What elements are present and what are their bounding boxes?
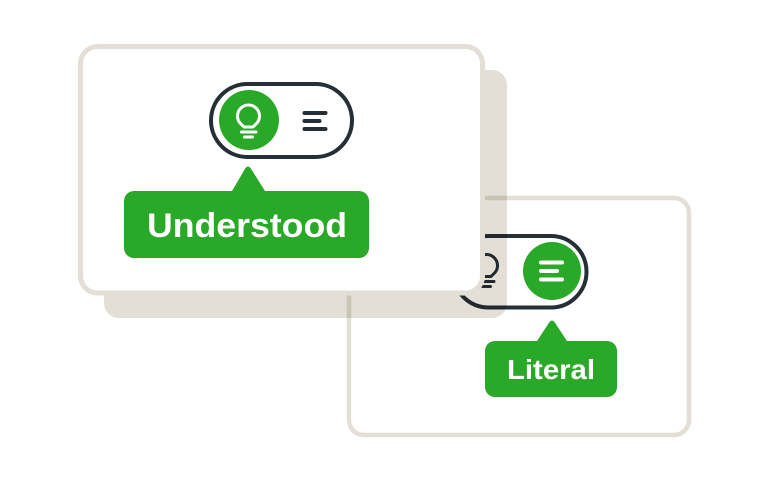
toggle: literal selected bbox=[453, 236, 586, 308]
tag: Literal bbox=[485, 320, 617, 397]
panel: front card bbox=[80, 46, 482, 293]
toggle outline bbox=[211, 84, 352, 157]
panel: card shadow bbox=[104, 70, 507, 318]
toggle outline bbox=[453, 236, 586, 308]
tag shape bbox=[124, 166, 369, 258]
tag: Understood bbox=[124, 166, 369, 258]
icon: green circle with text lines bbox=[523, 242, 581, 300]
tag label: Literal bbox=[507, 354, 595, 385]
tag label: Understood bbox=[147, 207, 347, 245]
toggle: understood selected bbox=[211, 84, 352, 157]
icon: partially hidden light bulb bbox=[476, 255, 498, 286]
tag shape bbox=[485, 320, 617, 397]
icon: text lines bbox=[304, 113, 326, 129]
panel: back card bbox=[349, 198, 689, 435]
icon: green circle with light bulb bbox=[219, 90, 279, 150]
